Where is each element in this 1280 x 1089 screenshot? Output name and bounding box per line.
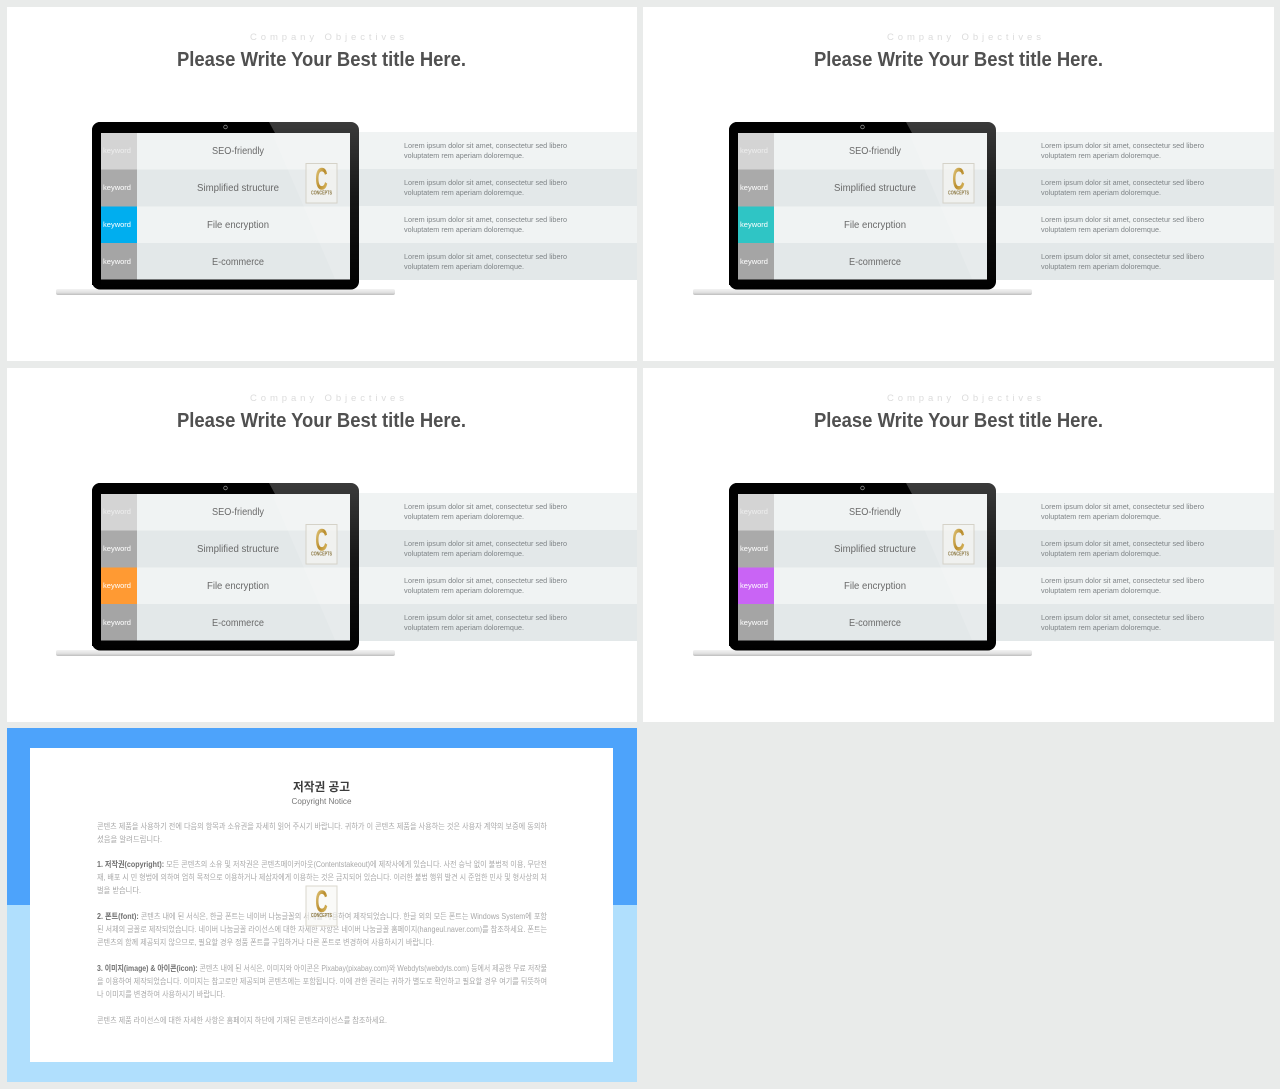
intro paragraph: 셨음을 알려드립니다. bbox=[97, 834, 162, 844]
laptop: keyword bbox=[103, 183, 131, 192]
eyebrow: company objectives: Company Objectives bbox=[250, 393, 404, 404]
panel: copyright notice slide bbox=[7, 728, 637, 1082]
laptop: keyword bbox=[740, 544, 768, 553]
logo watermark bbox=[306, 162, 337, 203]
closing line: 콘텐츠 제품 라이선스에 대한 자세한 사항은 홈페이지 하단에 기재된 콘텐츠라이선스를 참조하세요. bbox=[97, 1015, 387, 1025]
logo watermark bbox=[306, 523, 337, 564]
laptop: keyword bbox=[103, 581, 131, 590]
description text: voluptatem rem aperiam doloremque. bbox=[404, 549, 524, 558]
notice subtitle: Copyright Notice bbox=[292, 796, 352, 806]
laptop: SEO-friendly bbox=[212, 507, 264, 518]
laptop: keyword bbox=[740, 581, 768, 590]
description text: voluptatem rem aperiam doloremque. bbox=[404, 188, 524, 197]
laptop: keyword bbox=[103, 507, 131, 516]
section 1 copyright: 재, 배포 시 민 형법에 의하여 엄히 목적으로 이용하거나 제삼자에게 이용하는 것은 금지되어 있습니다. 이러한 불법 행위 발견 시 준엄한 민사 및 형사상의 처 bbox=[97, 872, 547, 882]
title: Please Write Your Best title Here. bbox=[177, 49, 466, 71]
description text: Lorem ipsum dolor sit amet, consectetur sed libero bbox=[1041, 576, 1204, 585]
eyebrow: company objectives: Company Objectives bbox=[887, 393, 1041, 404]
logo watermark bbox=[943, 523, 974, 564]
description text: voluptatem rem aperiam doloremque. bbox=[1041, 623, 1161, 632]
logo watermark: C bbox=[315, 162, 328, 197]
logo watermark: CONCEPTS bbox=[311, 190, 333, 196]
description text: voluptatem rem aperiam doloremque. bbox=[404, 151, 524, 160]
description text bbox=[404, 502, 567, 632]
description text: Lorem ipsum dolor sit amet, consectetur sed libero bbox=[404, 613, 567, 622]
description text: Lorem ipsum dolor sit amet, consectetur sed libero bbox=[404, 252, 567, 261]
description text: voluptatem rem aperiam doloremque. bbox=[404, 623, 524, 632]
laptop bbox=[56, 122, 395, 295]
laptop: keyword bbox=[740, 257, 768, 266]
laptop bbox=[693, 483, 1032, 656]
notice title: 저작권 공고 bbox=[293, 779, 350, 794]
description text: voluptatem rem aperiam doloremque. bbox=[404, 586, 524, 595]
panel: slide 3 orange keyword bbox=[7, 368, 637, 722]
description text bbox=[404, 141, 567, 271]
description text: Lorem ipsum dolor sit amet, consectetur sed libero bbox=[404, 215, 567, 224]
laptop: keyword bbox=[103, 544, 131, 553]
eyebrow: company objectives: Company Objectives bbox=[887, 32, 1041, 43]
description text bbox=[1041, 141, 1204, 271]
title: Please Write Your Best title Here. bbox=[814, 410, 1103, 432]
panel: slide 1 blue keyword bbox=[7, 7, 637, 361]
description bands bbox=[992, 132, 1274, 280]
laptop: keyword bbox=[740, 183, 768, 192]
laptop: keyword bbox=[103, 146, 131, 155]
panel: slide 2 teal keyword bbox=[643, 7, 1274, 361]
laptop: keyword bbox=[740, 618, 768, 627]
description text: Lorem ipsum dolor sit amet, consectetur sed libero bbox=[1041, 252, 1204, 261]
description text: Lorem ipsum dolor sit amet, consectetur sed libero bbox=[404, 178, 567, 187]
description text: voluptatem rem aperiam doloremque. bbox=[404, 225, 524, 234]
description text: Lorem ipsum dolor sit amet, consectetur sed libero bbox=[1041, 539, 1204, 548]
description text: Lorem ipsum dolor sit amet, consectetur sed libero bbox=[1041, 141, 1204, 150]
section 1 copyright bbox=[97, 859, 547, 895]
laptop: File encryption bbox=[844, 581, 906, 592]
section 3 image and icon bbox=[97, 963, 547, 999]
description text: voluptatem rem aperiam doloremque. bbox=[1041, 586, 1161, 595]
laptop: SEO-friendly bbox=[849, 146, 901, 157]
description text: voluptatem rem aperiam doloremque. bbox=[404, 262, 524, 271]
logo watermark: CONCEPTS bbox=[948, 552, 970, 558]
logo watermark bbox=[943, 162, 974, 203]
logo watermark bbox=[306, 885, 337, 926]
description text: Lorem ipsum dolor sit amet, consectetur sed libero bbox=[404, 576, 567, 585]
logo watermark: C bbox=[315, 885, 328, 919]
laptop bbox=[693, 122, 1032, 295]
section 2 font: 2. 폰트(font): 콘텐츠 내에 된 서식은, 한글 폰트는 네이버 나눔글꼴의 서체를 사용하여 제작되었습니다. 한글 외의 모든 폰트는 Windows System에 포함 bbox=[97, 911, 548, 921]
description text: Lorem ipsum dolor sit amet, consectetur sed libero bbox=[1041, 502, 1204, 511]
laptop: keyword bbox=[740, 146, 768, 155]
laptop: Simplified structure bbox=[834, 544, 916, 555]
logo watermark: CONCEPTS bbox=[311, 552, 333, 558]
laptop: keyword bbox=[740, 220, 768, 229]
laptop: keyword bbox=[103, 220, 131, 229]
laptop: Simplified structure bbox=[834, 183, 916, 194]
laptop: keyword bbox=[103, 257, 131, 266]
description text: Lorem ipsum dolor sit amet, consectetur sed libero bbox=[404, 502, 567, 511]
section 3 image and icon: 나 이미지를 변경하여 사용하시기 바랍니다. bbox=[97, 989, 225, 999]
description text: Lorem ipsum dolor sit amet, consectetur sed libero bbox=[1041, 178, 1204, 187]
section 2 font bbox=[97, 911, 548, 947]
laptop: E-commerce bbox=[849, 257, 901, 268]
laptop: keyword bbox=[103, 618, 131, 627]
section 2 font: 콘텐츠의 함께 제공되지 않으므로, 필요할 경우 정품 폰트를 구입하거나 다른 폰트로 변경하여 사용하시기 바랍니다. bbox=[97, 937, 434, 947]
description text: Lorem ipsum dolor sit amet, consectetur sed libero bbox=[404, 141, 567, 150]
laptop: File encryption bbox=[207, 220, 269, 231]
laptop: File encryption bbox=[207, 581, 269, 592]
description bands bbox=[355, 493, 637, 641]
notice card bbox=[30, 748, 613, 1062]
description text: voluptatem rem aperiam doloremque. bbox=[1041, 151, 1161, 160]
laptop: SEO-friendly bbox=[849, 507, 901, 518]
logo watermark: CONCEPTS bbox=[948, 190, 970, 196]
logo watermark: C bbox=[952, 162, 965, 197]
intro paragraph bbox=[97, 821, 548, 844]
description bands bbox=[355, 132, 637, 280]
section 1 copyright: 1. 저작권(copyright): 모든 콘텐츠의 소유 및 저작권은 콘텐츠메이커아웃(Contentstakeout)에 제작사에게 있습니다. 사전 승낙 없이 불법적 이용, 무단전 bbox=[97, 859, 547, 869]
section 2 font: 된 서체의 글꼴로 제작되었습니다. 네이버 나눔글꼴 라이선스에 대한 자세한 사항은 네이버 나눔글꼴 홈페이지(hangeul.naver.com)를 참조하세요. 폰트는 bbox=[97, 924, 547, 934]
description bands bbox=[992, 493, 1274, 641]
laptop: File encryption bbox=[844, 220, 906, 231]
laptop: E-commerce bbox=[212, 618, 264, 629]
title: Please Write Your Best title Here. bbox=[177, 410, 466, 432]
panel: slide 4 purple keyword bbox=[643, 368, 1274, 722]
description text: Lorem ipsum dolor sit amet, consectetur sed libero bbox=[404, 539, 567, 548]
laptop: Simplified structure bbox=[197, 183, 279, 194]
description text: voluptatem rem aperiam doloremque. bbox=[404, 512, 524, 521]
description text: voluptatem rem aperiam doloremque. bbox=[1041, 188, 1161, 197]
description text: voluptatem rem aperiam doloremque. bbox=[1041, 262, 1161, 271]
description text bbox=[1041, 502, 1204, 632]
laptop: SEO-friendly bbox=[212, 146, 264, 157]
description text: voluptatem rem aperiam doloremque. bbox=[1041, 549, 1161, 558]
logo watermark: C bbox=[952, 523, 965, 558]
section 3 image and icon: 을 이용하여 제작되었습니다. 이미지는 참고로만 제공되며 콘텐츠에는 포함됩니다. 이에 관한 권리는 귀하가 별도로 확인하고 필요할 경우 여기를 뒤뜻하여 bbox=[97, 976, 547, 986]
description text: Lorem ipsum dolor sit amet, consectetur sed libero bbox=[1041, 613, 1204, 622]
laptop: E-commerce bbox=[849, 618, 901, 629]
intro paragraph: 콘텐츠 제품을 사용하기 전에 다음의 항목과 소유권을 자세히 읽어 주시기 바랍니다. 귀하가 이 콘텐츠 제품을 사용하는 것은 사용자 계약의 보증에 동의하 bbox=[97, 821, 548, 831]
eyebrow: company objectives: Company Objectives bbox=[250, 32, 404, 43]
description text: voluptatem rem aperiam doloremque. bbox=[1041, 512, 1161, 521]
section 1 copyright: 벌을 받습니다. bbox=[97, 885, 141, 895]
laptop: Simplified structure bbox=[197, 544, 279, 555]
description text: voluptatem rem aperiam doloremque. bbox=[1041, 225, 1161, 234]
logo watermark: C bbox=[315, 523, 328, 558]
title: Please Write Your Best title Here. bbox=[814, 49, 1103, 71]
description text: Lorem ipsum dolor sit amet, consectetur sed libero bbox=[1041, 215, 1204, 224]
laptop bbox=[56, 483, 395, 656]
laptop: keyword bbox=[740, 507, 768, 516]
laptop: E-commerce bbox=[212, 257, 264, 268]
logo watermark: CONCEPTS bbox=[311, 913, 333, 919]
section 3 image and icon: 3. 이미지(image) & 아이콘(icon): 콘텐츠 내에 된 서식은, 이미지와 아이콘은 Pixabay(pixabay.com)와 Webdyts(webdyts.com) 등에서 제공한 무료 저작물 bbox=[97, 963, 547, 973]
